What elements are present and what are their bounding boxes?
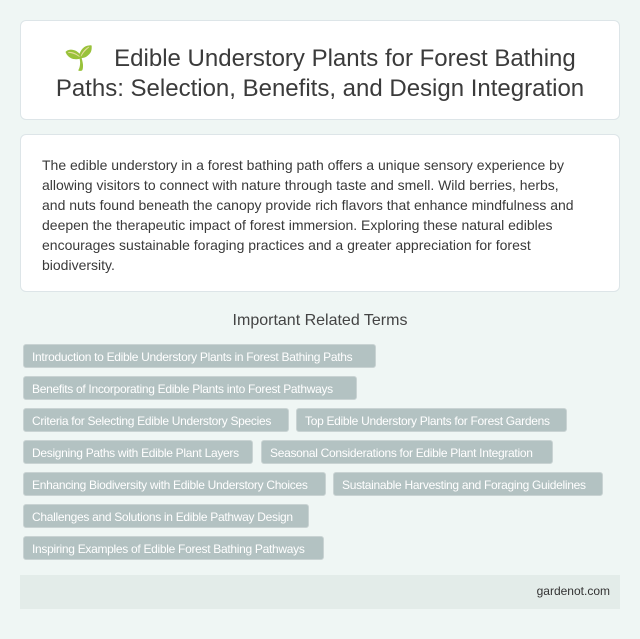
- heading: related terms: Important Related Terms: [233, 312, 407, 329]
- tag: [23, 536, 324, 560]
- tag: Top Edible Understory Plants for Forest Gardens: [305, 414, 550, 428]
- title card: [20, 20, 620, 120]
- tag: Challenges and Solutions in Edible Pathway Design: [32, 510, 293, 524]
- tag: Benefits of Incorporating Edible Plants into Forest Pathways: [32, 382, 333, 396]
- description text: deepen the therapeutic impact of forest immersion. Exploring these natural edibles: [42, 217, 553, 233]
- tag: Criteria for Selecting Edible Understory Species: [32, 414, 271, 428]
- description text: The edible understory in a forest bathing path offers a unique sensory experience by: [42, 157, 564, 173]
- tag: Sustainable Harvesting and Foraging Guidelines: [342, 478, 586, 492]
- description text: [42, 157, 574, 273]
- tag: Inspiring Examples of Edible Forest Bathing Pathways: [32, 542, 305, 556]
- tag: [296, 408, 567, 432]
- tag: [23, 504, 309, 528]
- tag: [23, 408, 289, 432]
- tag: [333, 472, 603, 496]
- tag: [23, 440, 253, 464]
- tag: Designing Paths with Edible Plant Layers: [32, 446, 239, 460]
- description text: biodiversity.: [42, 257, 115, 273]
- description card: [20, 134, 620, 292]
- title: 🌱 Edible Understory Plants for Forest Bathing: [64, 45, 576, 72]
- tag: [23, 344, 376, 368]
- tag: Seasonal Considerations for Edible Plant Integration: [270, 446, 533, 460]
- footer: [20, 575, 620, 609]
- footer text: gardenot.com: [537, 584, 610, 598]
- title: Paths: Selection, Benefits, and Design Integration: [56, 75, 584, 102]
- description text: allowing visitors to connect with nature through taste and smell. Wild berries, herbs,: [42, 177, 559, 193]
- tag: Enhancing Biodiversity with Edible Understory Choices: [32, 478, 308, 492]
- description text: and nuts found beneath the canopy provide rich flavors that enhance mindfulness and: [42, 197, 574, 213]
- tag: [23, 472, 326, 496]
- tag: [261, 440, 553, 464]
- tag: Introduction to Edible Understory Plants in Forest Bathing Paths: [32, 350, 352, 364]
- tag: [23, 376, 357, 400]
- description text: encourages sustainable foraging practices and a greater appreciation for forest: [42, 237, 531, 253]
- title: [56, 45, 584, 102]
